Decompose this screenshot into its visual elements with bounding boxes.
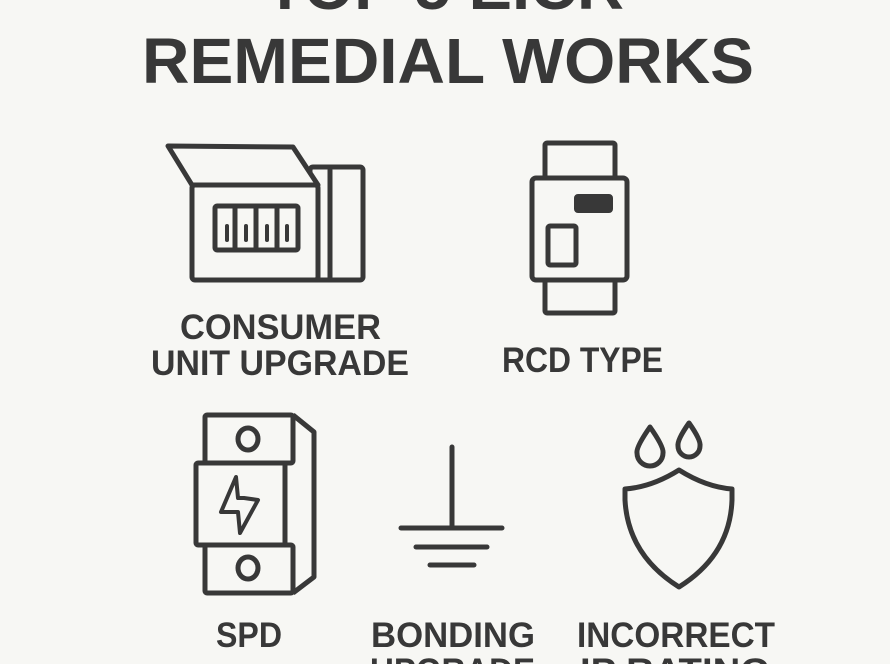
label: incorrect IP rating: INCORRECT (577, 616, 775, 655)
label: bonding upgrade: BONDING (371, 616, 535, 655)
icon: consumer unit (168, 146, 363, 280)
icon: SPD (196, 415, 314, 593)
label: SPD: SPD (216, 616, 282, 655)
icon: earth / bonding (401, 447, 502, 565)
label: consumer unit upgrade: UNIT UPGRADE (151, 344, 409, 383)
icon: RCD (532, 143, 627, 313)
label: consumer unit upgrade (151, 308, 409, 383)
title: REMEDIAL WORKS (142, 25, 754, 97)
label: RCD type: RCD TYPE (502, 341, 663, 380)
icon: shield with water drops (625, 423, 732, 587)
label: consumer unit upgrade: CONSUMER (180, 308, 381, 347)
